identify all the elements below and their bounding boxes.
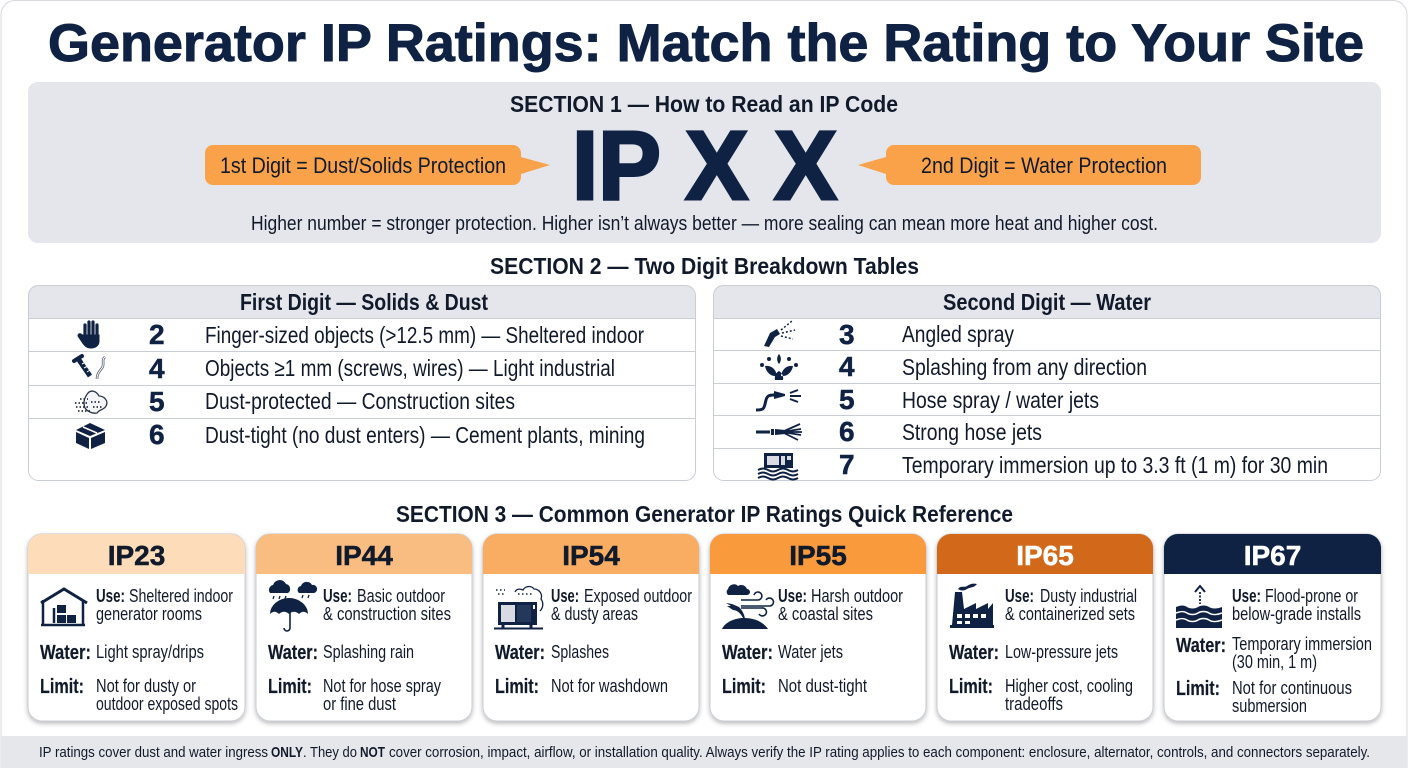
- water: Splashing rain: [323, 642, 414, 662]
- row: digit 2: [78, 319, 644, 350]
- icon: flood level: [1176, 586, 1222, 628]
- water: Low-pressure jets: [1005, 642, 1118, 662]
- icon: generator in dust: [494, 586, 543, 628]
- limit: Limit:: [495, 676, 539, 698]
- use: Harsh outdoor: [811, 586, 903, 606]
- water: Water:: [268, 642, 318, 664]
- row: digit 7: [758, 449, 1328, 480]
- table heading: first digit: First Digit — Solids & Dust: [240, 289, 488, 315]
- use: Use:: [1232, 586, 1261, 606]
- use: generator rooms: [96, 604, 202, 624]
- table heading: second digit: Second Digit — Water: [943, 289, 1151, 315]
- panel: first digit table: [28, 285, 696, 480]
- row: digit 2: Finger-sized objects (>12.5 mm) — Sheltered indoor: [205, 322, 644, 348]
- use: Use:: [551, 586, 579, 606]
- callout: first digit: [205, 145, 550, 185]
- icon: water splash: [760, 354, 798, 380]
- row: digit 3: 3: [839, 319, 855, 350]
- use: & coastal sites: [778, 604, 873, 624]
- water: [722, 642, 843, 664]
- card title: IP67: [1244, 540, 1301, 571]
- use: Use:: [96, 586, 125, 606]
- row: digit 7: 7: [839, 449, 855, 480]
- card: IP67: [1164, 534, 1381, 721]
- water: [40, 642, 204, 664]
- footer note: IP ratings cover dust and water ingress: [39, 744, 268, 761]
- limit: outdoor exposed spots: [96, 694, 238, 714]
- row: digit 7: Temporary immersion up to 3.3 ft (1 m) for 30 min: [902, 452, 1328, 478]
- card title: IP23: [108, 540, 165, 571]
- water: Water:: [40, 642, 91, 664]
- water: [1176, 634, 1372, 672]
- row: digit 3: [764, 319, 1014, 350]
- row: digit 4: [760, 351, 1147, 382]
- heading: section 2: SECTION 2 — Two Digit Breakdown Tables: [490, 253, 919, 279]
- use: [323, 586, 451, 624]
- icon: screw and wire: [74, 356, 105, 379]
- card: IP55: [710, 534, 926, 721]
- row: digit 6: 6: [839, 416, 855, 447]
- row: digit 4: [74, 353, 615, 384]
- limit: Limit:: [722, 676, 766, 698]
- card title: IP54: [562, 540, 620, 571]
- card: IP65: [937, 534, 1153, 721]
- row: digit 4: 4: [839, 351, 855, 382]
- use: Flood-prone or: [1265, 586, 1358, 606]
- icon: hose spray: [756, 390, 801, 410]
- panel: second digit table: [713, 285, 1381, 480]
- callout: second digit: 2nd Digit = Water Protection: [921, 153, 1167, 178]
- use: & containerized sets: [1005, 604, 1135, 624]
- row: digit 6: 6: [149, 419, 165, 450]
- limit: submersion: [1232, 696, 1307, 716]
- callout: first digit: 1st Digit = Dust/Solids Protection: [220, 153, 506, 178]
- row: digit 5: 5: [839, 384, 855, 415]
- card title: IP55: [789, 540, 847, 571]
- icon: house with boxes: [41, 589, 87, 625]
- use: [551, 586, 692, 624]
- water: Water jets: [778, 642, 843, 662]
- limit: Limit:: [268, 676, 312, 698]
- row: digit 4: Objects ≥1 mm (screws, wires) — Light industrial: [205, 355, 615, 381]
- footer note: ONLY: [271, 744, 303, 761]
- use: & dusty areas: [551, 604, 638, 624]
- card: IP44: [256, 534, 472, 721]
- footer note: NOT: [360, 744, 385, 761]
- use: Dusty industrial: [1040, 586, 1137, 606]
- note: higher is not always better: Higher number = stronger protection. Higher isn’t always better — more sealing can mean more heat and higher cost.: [251, 213, 1158, 235]
- icon: angled spray: [764, 321, 795, 347]
- icon: hand: [78, 322, 99, 348]
- limit: [1176, 678, 1352, 716]
- use: below-grade installs: [1232, 604, 1361, 624]
- footer note: [0, 736, 1408, 768]
- limit: [949, 676, 1133, 714]
- icon: strong hose jet: [756, 424, 802, 440]
- IP code graphic: IP X X: [572, 111, 837, 220]
- row: digit 2: 2: [149, 319, 165, 350]
- row: digit 4: Splashing from any direction: [902, 354, 1147, 380]
- row: digit 5: Hose spray / water jets: [902, 387, 1099, 413]
- water: (30 min, 1 m): [1232, 652, 1317, 672]
- icon: umbrella in rain: [269, 580, 317, 631]
- icon: sealed box: [76, 423, 105, 449]
- icon: wind on coast: [722, 584, 773, 629]
- limit: Not for hose spray: [323, 676, 441, 696]
- row: digit 3: Angled spray: [902, 321, 1014, 347]
- use: & construction sites: [323, 604, 451, 624]
- row: digit 5: Dust-protected — Construction sites: [205, 388, 515, 414]
- water: [495, 642, 609, 664]
- water: Water:: [495, 642, 545, 664]
- limit: Limit:: [40, 676, 84, 698]
- limit: [268, 676, 441, 714]
- water: Temporary immersion: [1232, 634, 1372, 654]
- card: IP23: [28, 534, 245, 721]
- icon: factory: [950, 584, 994, 628]
- limit: Limit:: [1176, 678, 1220, 700]
- title: Generator IP Ratings: Match the Rating to Your Site: [48, 14, 1364, 73]
- row: digit 4: 4: [149, 353, 165, 384]
- limit: Not for continuous: [1232, 678, 1352, 698]
- limit: tradeoffs: [1005, 694, 1063, 714]
- heading: section 3: SECTION 3 — Common Generator IP Ratings Quick Reference: [396, 501, 1013, 527]
- use: [778, 586, 903, 624]
- water: [268, 642, 414, 664]
- use: Sheltered indoor: [129, 586, 233, 606]
- limit: [495, 676, 668, 698]
- water: [949, 642, 1118, 664]
- use: Use:: [778, 586, 807, 606]
- row: digit 6: [756, 416, 1042, 447]
- limit: [40, 676, 238, 714]
- row: digit 6: Strong hose jets: [902, 419, 1042, 445]
- icon: dust cloud: [75, 391, 107, 413]
- row: digit 5: 5: [149, 386, 165, 417]
- limit: Not dust-tight: [778, 676, 867, 696]
- callout: second digit: [858, 145, 1201, 185]
- water: Water:: [949, 642, 999, 664]
- use: Use:: [323, 586, 352, 606]
- water: Water:: [1176, 635, 1226, 657]
- limit: Not for washdown: [551, 676, 668, 696]
- limit: Not for dusty or: [96, 676, 196, 696]
- use: [1232, 586, 1361, 624]
- card title: IP65: [1016, 540, 1074, 571]
- use: [1005, 586, 1137, 624]
- limit: Limit:: [949, 676, 993, 698]
- use: Exposed outdoor: [584, 586, 692, 606]
- use: [96, 586, 233, 624]
- limit: or fine dust: [323, 694, 396, 714]
- icon: generator in water: [758, 453, 798, 480]
- footer note: . They do: [303, 744, 357, 761]
- water: Splashes: [551, 642, 609, 662]
- limit: [722, 676, 867, 698]
- limit: Higher cost, cooling: [1005, 676, 1133, 696]
- use: Use:: [1005, 586, 1034, 606]
- water: Light spray/drips: [96, 642, 204, 662]
- heading: section 1: SECTION 1 — How to Read an IP Code: [510, 91, 898, 117]
- card: IP54: [483, 534, 699, 721]
- card title: IP44: [335, 540, 393, 571]
- row: digit 5: [75, 386, 515, 417]
- row: digit 6: Dust-tight (no dust enters) — Cement plants, mining: [205, 422, 645, 448]
- panel: section 1 how to read an IP code: [28, 82, 1381, 243]
- row: digit 6: [76, 419, 645, 450]
- use: Basic outdoor: [357, 586, 445, 606]
- water: Water:: [722, 642, 773, 664]
- row: digit 5: [756, 384, 1099, 415]
